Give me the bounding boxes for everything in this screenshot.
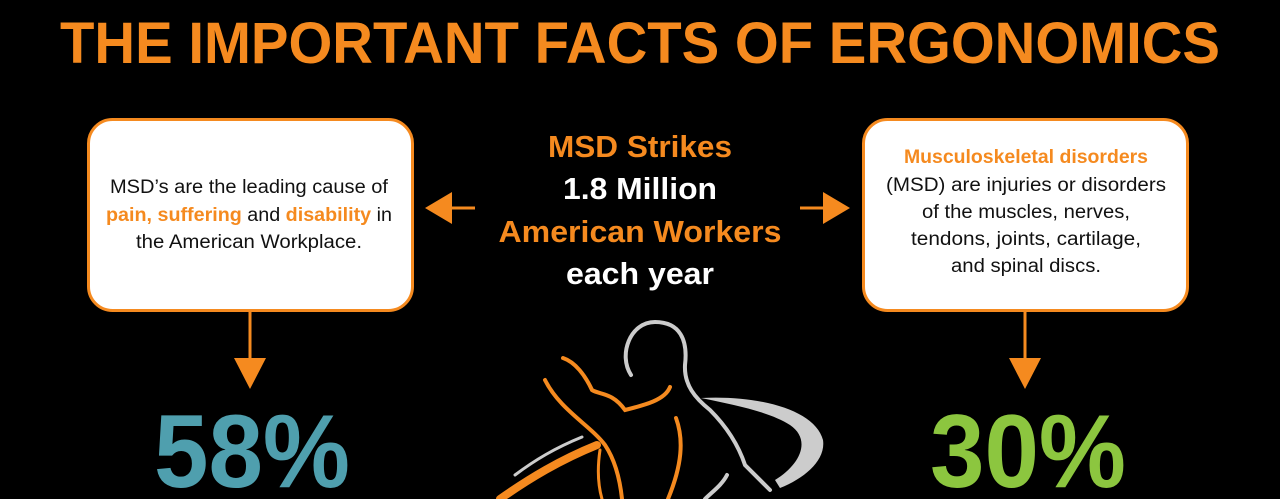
center text: [498, 129, 782, 291]
right box text: and spinal discs.: [951, 256, 1101, 277]
center text: each year: [566, 256, 714, 291]
left box text: MSD’s are the leading cause of: [110, 177, 389, 198]
right box text: Musculoskeletal disorders: [904, 147, 1148, 168]
arrow: down right: [1009, 311, 1041, 389]
right box text: of the muscles, nerves,: [922, 202, 1130, 223]
left box text: the American Workplace.: [136, 232, 362, 253]
left box text: [106, 177, 392, 253]
panel: left box: [88, 120, 412, 310]
arrow: right: [800, 192, 850, 224]
panel: right box: [864, 120, 1188, 310]
icon: ergonomic figure: [500, 322, 823, 499]
right box text: (MSD) are injuries or disorders: [886, 175, 1166, 196]
arrow: left: [425, 192, 475, 224]
center text: MSD Strikes: [548, 129, 732, 164]
left box text: pain, suffering and disability in: [106, 205, 392, 226]
arrow: down left: [234, 311, 266, 389]
center text: 1.8 Million: [563, 171, 717, 206]
title: THE IMPORTANT FACTS OF ERGONOMICS: [60, 11, 1220, 76]
right box text: tendons, joints, cartilage,: [911, 229, 1141, 250]
right box text: [886, 147, 1166, 277]
center text: American Workers: [498, 214, 782, 249]
